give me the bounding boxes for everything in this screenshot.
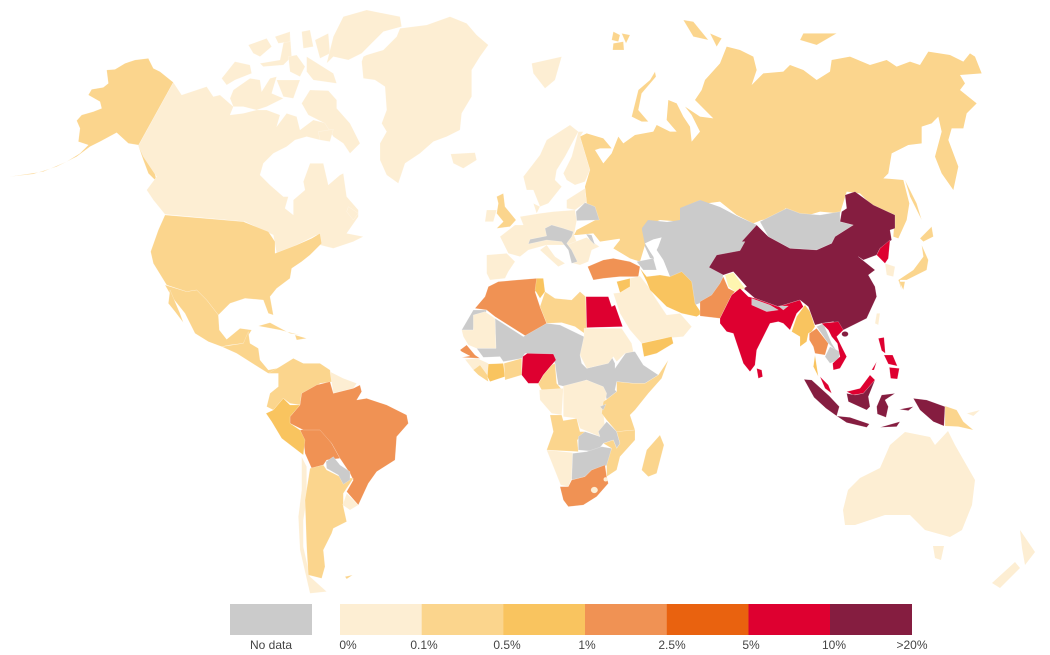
Mauritania	[462, 312, 496, 348]
map: sub-Saharan Africa	[460, 312, 673, 507]
Pakistan	[700, 277, 735, 318]
legend: labels: >20%	[896, 638, 928, 652]
legend: labels: No data	[250, 638, 292, 652]
Myanmar	[792, 305, 815, 347]
legend	[230, 604, 928, 652]
Baja California	[168, 290, 183, 323]
legend: labels: 0.1%	[410, 638, 438, 652]
Angola	[547, 415, 585, 452]
Kenya, Somalia, Tanzania	[602, 360, 668, 432]
Finland	[563, 132, 590, 185]
DR Congo and Central African Republic	[563, 380, 607, 437]
legend: labels: 0%	[339, 638, 357, 652]
Colombia, Venezuela, Ecuador	[267, 358, 333, 410]
map: central Asia no data	[642, 200, 757, 305]
Nigeria	[522, 353, 556, 383]
Western Sahara	[462, 310, 487, 330]
Thai peninsula	[813, 355, 818, 377]
Australia	[843, 431, 975, 537]
legend: labels: 1%	[578, 638, 596, 652]
map: the Americas	[151, 215, 408, 593]
Ghana, Togo, Benin	[504, 358, 522, 380]
Vietnam	[822, 322, 847, 370]
legend: colour scale	[340, 604, 912, 635]
Alaska	[10, 58, 173, 182]
Japan	[898, 227, 933, 290]
legend: no data swatch	[230, 604, 312, 635]
Paraguay	[326, 457, 350, 484]
Indonesia	[804, 379, 945, 427]
Madagascar	[642, 435, 664, 477]
Italy	[540, 245, 565, 267]
Iceland	[451, 153, 477, 168]
Spain and Portugal	[487, 253, 515, 280]
Moldova	[586, 234, 595, 245]
Belarus	[576, 203, 599, 221]
Norway and Sweden	[523, 125, 578, 207]
Egypt	[586, 297, 623, 328]
Caribbean islands	[258, 323, 307, 340]
Morocco and Algeria	[475, 278, 547, 337]
Mongolia	[760, 208, 853, 250]
Zambia and Malawi	[578, 422, 620, 452]
map: Europe and Middle East	[462, 203, 702, 343]
Bolivia	[300, 428, 340, 468]
legend: labels: 0.5%	[493, 638, 521, 652]
New Zealand	[992, 530, 1035, 588]
Argentina	[305, 465, 353, 578]
Taiwan	[875, 313, 880, 325]
Tasmania	[933, 546, 944, 560]
Saudi Arabia, Iraq, Oman	[613, 276, 692, 343]
legend: labels: 10%	[822, 638, 846, 652]
Sierra Leone and Liberia	[473, 365, 488, 382]
Baltic states	[567, 188, 587, 210]
Russian Arctic islands and Sakhalin	[612, 20, 922, 220]
Svalbard	[532, 57, 562, 88]
North Korea	[877, 240, 890, 263]
Namibia	[547, 450, 573, 487]
Peru	[266, 398, 305, 455]
Libya	[540, 292, 587, 335]
Cote d'Ivoire	[487, 363, 505, 382]
Philippines	[872, 337, 899, 379]
Russia	[580, 47, 982, 240]
legend: labels	[250, 638, 928, 652]
Denmark	[533, 203, 540, 213]
Cambodia	[825, 347, 840, 363]
legend: labels: 5%	[742, 638, 760, 652]
Central America	[222, 332, 278, 373]
Eswatini	[604, 477, 608, 481]
Rwanda and Burundi	[600, 404, 606, 410]
United Kingdom	[497, 193, 516, 228]
Guinea	[465, 358, 488, 375]
China	[709, 192, 895, 330]
Hainan	[842, 331, 848, 337]
Syria	[617, 278, 630, 293]
map: Russia and northern Europe	[523, 20, 982, 240]
Bhutan	[778, 306, 788, 310]
South Africa	[560, 465, 608, 507]
Botswana and Zimbabwe	[572, 447, 612, 480]
Iran	[640, 268, 702, 317]
Turkey	[588, 258, 640, 280]
Tunisia	[535, 278, 545, 298]
Yemen	[642, 337, 673, 357]
Brazil	[290, 382, 408, 505]
Sri Lanka	[757, 368, 763, 378]
Sahel and Horn no data	[477, 318, 658, 399]
Lesotho	[591, 487, 598, 493]
United States	[151, 215, 322, 315]
Cameroon	[538, 363, 562, 390]
Laos	[817, 323, 838, 353]
Ireland	[485, 210, 497, 222]
Chile	[298, 457, 327, 593]
Kashmir	[725, 273, 745, 292]
Mozambique	[603, 430, 635, 477]
Sudan	[580, 328, 633, 368]
Greenland	[362, 17, 488, 183]
Uruguay	[343, 493, 358, 510]
Falkland Islands	[345, 575, 353, 579]
Nepal	[752, 298, 778, 312]
legend: labels: 2.5%	[658, 638, 686, 652]
Malaysia	[820, 375, 875, 395]
South Korea	[885, 263, 895, 277]
Canadian Arctic islands	[222, 10, 402, 220]
India	[720, 288, 803, 372]
Bismarck islands	[967, 410, 980, 416]
Canada	[138, 82, 363, 253]
Thailand	[809, 328, 828, 355]
Balkans	[567, 237, 599, 265]
map: north america top	[10, 10, 516, 253]
Gabon and Congo	[539, 388, 563, 415]
central Europe no data	[528, 225, 577, 263]
Mexico	[165, 285, 252, 347]
map: east and south Asia	[700, 192, 980, 430]
Senegal	[460, 345, 480, 358]
southern Russia	[574, 210, 648, 262]
Guianas	[330, 372, 357, 393]
Caspian Sea	[645, 237, 670, 277]
Papua New Guinea	[945, 406, 973, 430]
Caucasus	[637, 258, 657, 270]
western and central Europe	[500, 210, 577, 257]
